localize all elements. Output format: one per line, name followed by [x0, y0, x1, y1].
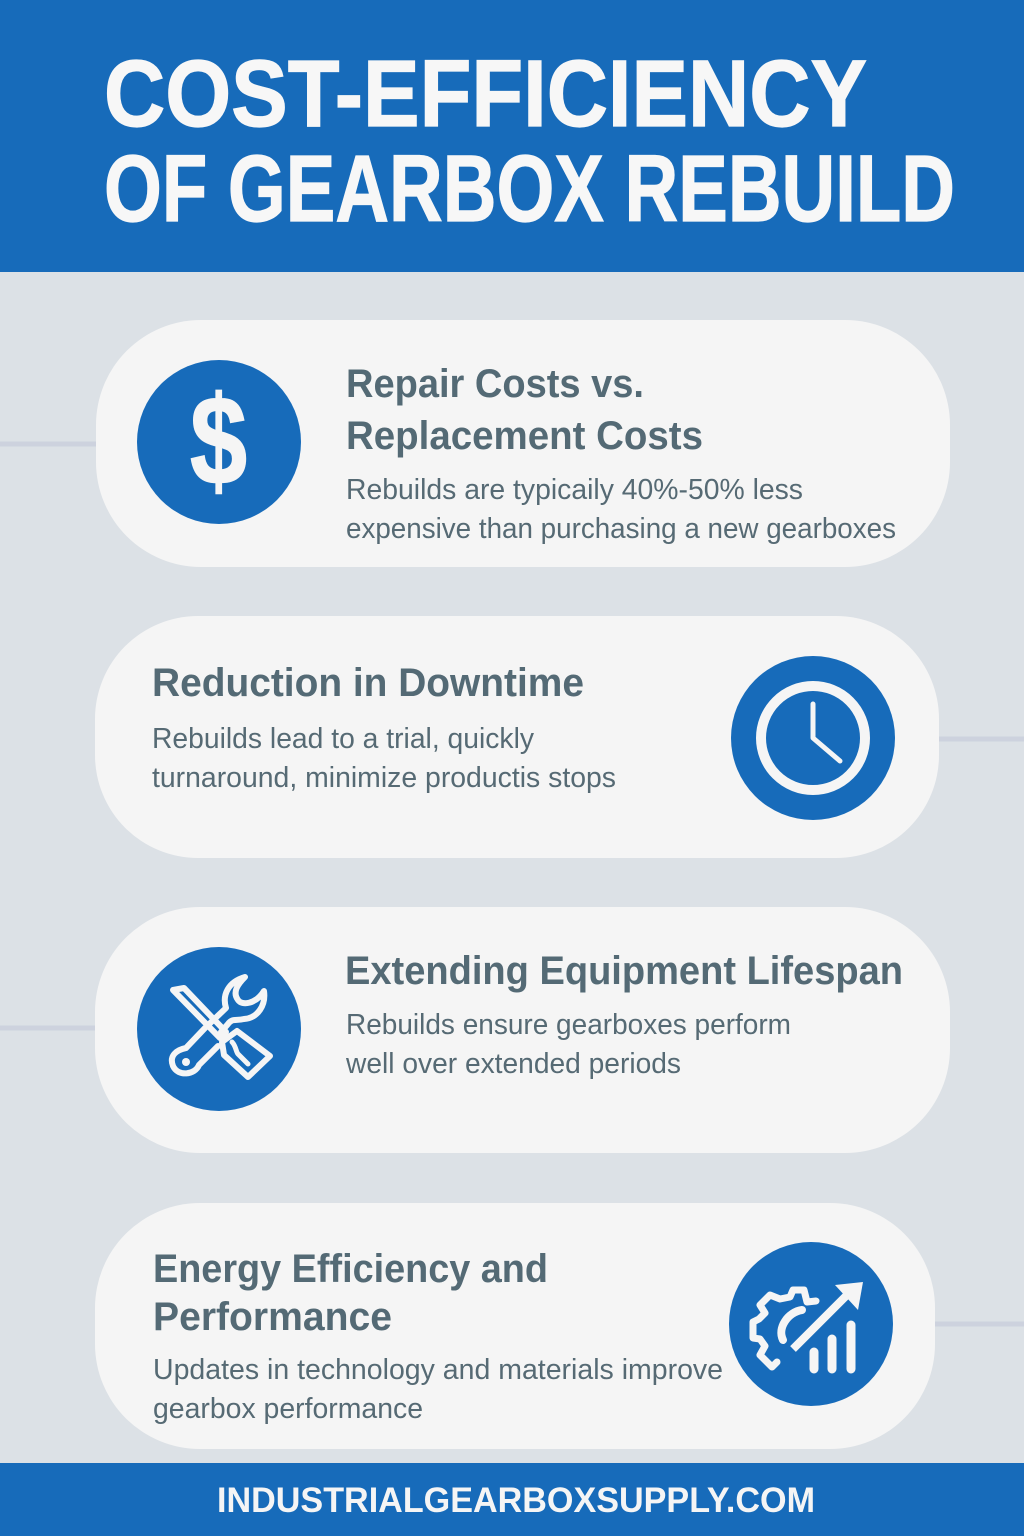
panel: energy efficiency and performance [95, 1203, 935, 1449]
icon: clock [731, 656, 895, 820]
text: lifespan description: Rebuilds ensure gearboxes perform [346, 1009, 791, 1041]
heading: energy efficiency: Energy Efficiency and [153, 1247, 548, 1291]
title [104, 41, 955, 242]
title banner [0, 0, 1024, 272]
panel: extending equipment lifespan [95, 907, 950, 1153]
text: downtime description: Rebuilds lead to a trial, quickly [152, 723, 534, 755]
heading: energy efficiency [153, 1247, 548, 1339]
icon: crossed tools [137, 947, 301, 1111]
text: lifespan description [345, 1009, 791, 1080]
title: COST-EFFICIENCY [104, 41, 867, 147]
icon: dollar sign: $ [190, 370, 247, 511]
heading: energy efficiency: Performance [153, 1295, 392, 1339]
footer website: INDUSTRIALGEARBOXSUPPLY.COM [217, 1481, 815, 1520]
text: lifespan description: well over extended periods [345, 1048, 681, 1080]
wrench [172, 977, 264, 1073]
text: energy description: Updates in technology and materials improve [153, 1354, 723, 1386]
heading: repair costs: Repair Costs vs. [346, 362, 644, 406]
footer banner [0, 1463, 1024, 1536]
text: repair costs description [346, 474, 896, 545]
heading: extending equipment lifespan: Extending Equipment Lifespan [345, 949, 903, 993]
heading: repair costs [346, 362, 703, 458]
icon: gear and growth arrow [729, 1242, 893, 1406]
text: repair costs description: Rebuilds are typicaily 40%-50% less [346, 474, 803, 506]
heading: repair costs: Replacement Costs [346, 414, 703, 458]
text: energy description [153, 1354, 723, 1425]
text: downtime description: turnaround, minimize productis stops [152, 762, 616, 794]
icon: dollar sign [137, 360, 301, 524]
panel: reduction in downtime [95, 616, 939, 858]
heading: reduction in downtime: Reduction in Downtime [152, 661, 584, 705]
panel: repair costs vs. replacement costs [96, 320, 950, 567]
text: energy description: gearbox performance [153, 1393, 423, 1425]
text: downtime description [152, 723, 616, 794]
text: repair costs description: expensive than purchasing a new gearboxes [346, 513, 896, 545]
screwdriver [173, 988, 270, 1077]
